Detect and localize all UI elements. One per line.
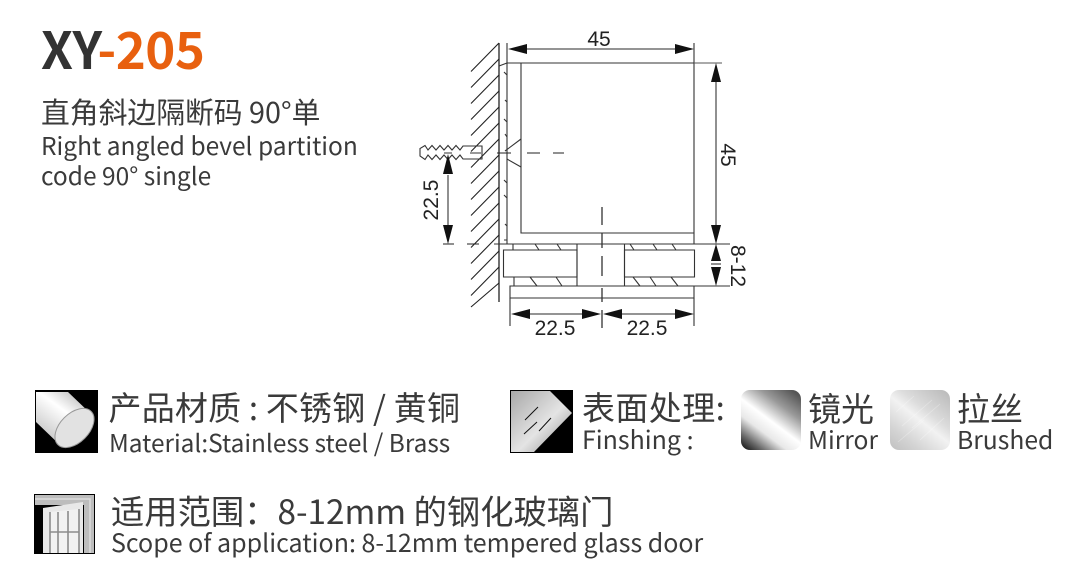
mirror english: Mirror bbox=[808, 421, 878, 457]
swatch: brushed bbox=[890, 390, 950, 450]
brushed label: 拉丝 bbox=[957, 383, 1023, 431]
dimension: 45 vertical: 45 bbox=[716, 143, 739, 167]
dimension: 22.5 left and right: 22.5 bbox=[627, 317, 667, 340]
dimension: 22.5 left and right: 22.5 bbox=[535, 317, 575, 340]
dimension: 22.5 vertical: 22.5 bbox=[420, 180, 443, 220]
dimension: 45 horizontal bbox=[508, 28, 694, 54]
glass panel outline bbox=[497, 43, 694, 244]
icon: surface treatment bbox=[510, 390, 573, 453]
dimension: 45 horizontal: 45 bbox=[587, 28, 611, 51]
dimension: 22.5 vertical bbox=[420, 154, 479, 244]
english product name: Right angled bevel partition bbox=[41, 128, 358, 163]
scope chinese: 适用范围：8-12mm 的钢化玻璃门 bbox=[111, 485, 613, 534]
wall anchor screw bbox=[420, 146, 482, 160]
chinese product name: 直角斜边隔断码 90°单 bbox=[41, 91, 320, 132]
brushed english: Brushed bbox=[957, 421, 1053, 457]
dimension: 8-12 vertical bbox=[711, 244, 749, 287]
icon: material cylinder bbox=[35, 390, 98, 453]
scope english: Scope of application: 8-12mm tempered glass door bbox=[111, 524, 703, 560]
dimension: 22.5 left and right bbox=[511, 309, 694, 340]
icon: door bbox=[34, 494, 95, 554]
dimension: 8-12 vertical: 8-12 bbox=[726, 245, 749, 287]
material chinese: 产品材质 : 不锈钢 / 黄铜 bbox=[108, 382, 460, 430]
surface treatment chinese: 表面处理: bbox=[582, 382, 725, 430]
dimension: 45 vertical bbox=[694, 63, 739, 244]
swatch: mirror bbox=[741, 390, 801, 450]
title: XY-205 bbox=[41, 10, 204, 84]
mirror label: 镜光 bbox=[808, 383, 874, 431]
material english: Material:Stainless steel / Brass bbox=[109, 425, 450, 460]
lower clamp and glass slot bbox=[494, 207, 730, 328]
english product name: code 90° single bbox=[41, 158, 211, 193]
wall hatching bbox=[471, 43, 499, 307]
surface treatment english: Finshing : bbox=[582, 421, 694, 457]
english product name bbox=[41, 128, 358, 193]
